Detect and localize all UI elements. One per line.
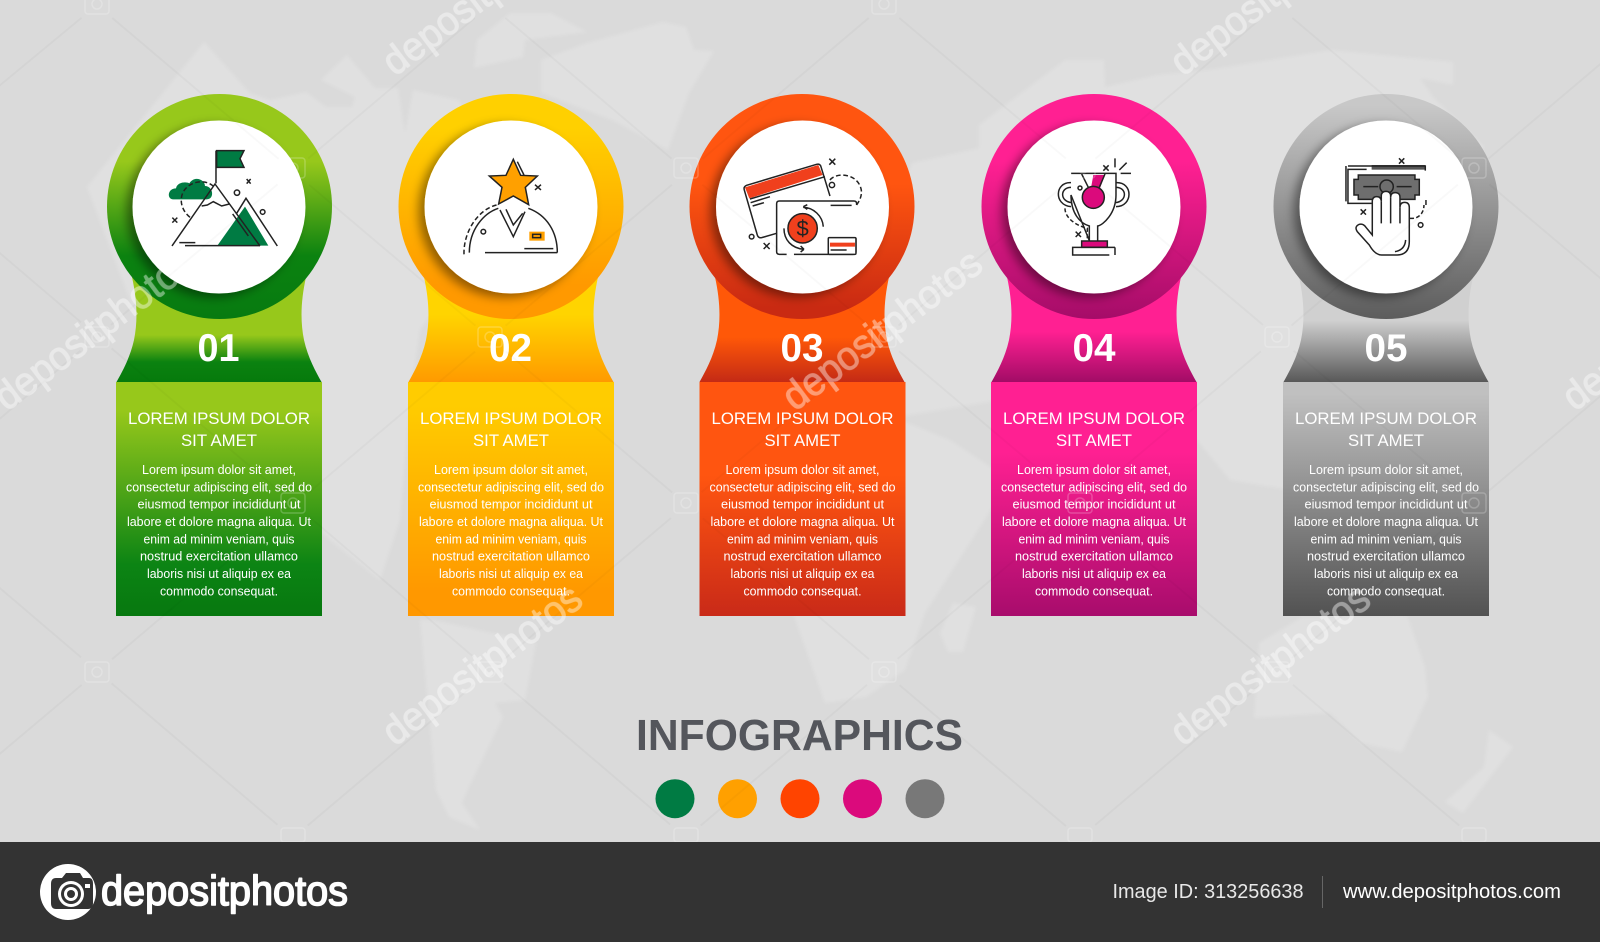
text block: eiusmod tempor incididunt ut	[1012, 498, 1176, 512]
white disc	[716, 120, 889, 294]
text block: enim ad minim veniam, quis	[1310, 532, 1462, 546]
watermark text: depositphotos	[1162, 576, 1378, 754]
text block: enim ad minim veniam, quis	[144, 532, 294, 546]
text block: enim ad minim veniam, quis	[727, 532, 878, 546]
text block: consectetur adipiscing elit, sed do	[1001, 480, 1187, 494]
text block	[710, 463, 896, 598]
neck and body	[1283, 277, 1489, 616]
icon: person with star	[464, 159, 557, 254]
text block	[1001, 463, 1187, 598]
text block: consectetur adipiscing elit, sed do	[418, 480, 604, 494]
text block: consectetur adipiscing elit, sed do	[126, 480, 312, 494]
panel: step 01	[107, 94, 332, 616]
text block: labore et dolore magna aliqua. Ut	[710, 515, 895, 529]
number: 01	[198, 327, 240, 370]
text block: eiusmod tempor incididunt ut	[721, 498, 885, 512]
text block: commodo consequat.	[744, 584, 862, 598]
ring	[1274, 94, 1498, 319]
text block	[418, 463, 604, 598]
text block: laboris nisi ut aliquip ex ea	[147, 567, 291, 581]
text block: labore et dolore magna aliqua. Ut	[1294, 515, 1479, 529]
text block: laboris nisi ut aliquip ex ea	[1314, 567, 1458, 581]
heading: LOREM IPSUM DOLOR	[1003, 409, 1185, 428]
text block: laboris nisi ut aliquip ex ea	[1022, 567, 1166, 581]
title: INFOGRAPHICS	[636, 711, 963, 760]
text block: Lorem ipsum dolor sit amet,	[1309, 463, 1463, 477]
panel: step 02	[398, 94, 624, 616]
text block: enim ad minim veniam, quis	[1018, 532, 1170, 546]
text block	[126, 463, 312, 598]
number: 04	[1072, 327, 1116, 370]
text block: nostrud exercitation ullamco	[724, 550, 882, 564]
heading: LOREM IPSUM DOLOR	[1295, 409, 1477, 428]
watermark camera marks	[85, 0, 1486, 842]
white disc	[1008, 120, 1180, 294]
white disc	[1300, 120, 1472, 294]
text block: eiusmod tempor incididunt ut	[430, 498, 593, 512]
heading	[420, 409, 602, 450]
logo icon: camera	[40, 864, 96, 920]
heading: SIT AMET	[1056, 431, 1132, 450]
text block: commodo consequat.	[160, 584, 278, 598]
text block: nostrud exercitation ullamco	[432, 550, 590, 564]
heading	[712, 409, 894, 450]
text block: laboris nisi ut aliquip ex ea	[439, 567, 583, 581]
heading	[1003, 409, 1185, 450]
neck and body	[116, 277, 322, 616]
heading: LOREM IPSUM DOLOR	[128, 409, 310, 428]
icon: mountain with flag	[169, 151, 277, 246]
text block: nostrud exercitation ullamco	[1015, 550, 1173, 564]
heading: SIT AMET	[181, 431, 257, 450]
neck and body	[700, 277, 906, 616]
text block: Lorem ipsum dolor sit amet,	[434, 463, 588, 477]
text block: enim ad minim veniam, quis	[436, 532, 586, 546]
watermark text: depositphotos	[774, 241, 990, 419]
ring	[107, 94, 332, 319]
icon: trophy with medal	[1058, 158, 1131, 255]
ring	[982, 94, 1206, 319]
neck and body	[991, 277, 1197, 616]
panel: step 05	[1274, 94, 1498, 616]
text block: eiusmod tempor incididunt ut	[1304, 498, 1468, 512]
text block: consectetur adipiscing elit, sed do	[1293, 480, 1479, 494]
icon: cards and dollar	[744, 159, 861, 254]
image id: Image ID: 313256638	[1112, 881, 1304, 903]
website: www.depositphotos.com	[1342, 881, 1561, 903]
text block: consectetur adipiscing elit, sed do	[710, 480, 896, 494]
heading: SIT AMET	[1348, 431, 1424, 450]
heading: LOREM IPSUM DOLOR	[420, 409, 602, 428]
white disc	[424, 120, 598, 294]
text block: commodo consequat.	[452, 584, 570, 598]
text block: nostrud exercitation ullamco	[1307, 550, 1465, 564]
legend dots	[656, 779, 944, 818]
text block: Lorem ipsum dolor sit amet,	[1017, 463, 1171, 477]
number: 03	[780, 327, 824, 370]
text block: labore et dolore magna aliqua. Ut	[127, 515, 312, 529]
text block: Lorem ipsum dolor sit amet,	[142, 463, 296, 477]
text block: labore et dolore magna aliqua. Ut	[1002, 515, 1187, 529]
heading	[128, 409, 310, 450]
text block: Lorem ipsum dolor sit amet,	[726, 463, 880, 477]
icon: hand on banknote	[1346, 158, 1426, 255]
heading: SIT AMET	[473, 431, 549, 450]
number: 05	[1364, 327, 1408, 370]
heading	[1295, 409, 1477, 450]
text block: eiusmod tempor incididunt ut	[138, 498, 301, 512]
ring	[398, 94, 624, 319]
watermark text: depositphotos	[374, 576, 590, 754]
world map silhouette	[87, 13, 1513, 830]
text block: laboris nisi ut aliquip ex ea	[730, 567, 875, 581]
footer bar	[0, 842, 1600, 942]
number: 02	[489, 327, 532, 370]
icon: cards and dollar: $	[797, 216, 809, 241]
panel: step 04	[982, 94, 1206, 616]
heading: LOREM IPSUM DOLOR	[712, 409, 894, 428]
white disc	[132, 120, 306, 294]
footer divider	[1322, 876, 1323, 908]
text block	[1293, 463, 1479, 598]
heading: SIT AMET	[764, 431, 840, 450]
text block: commodo consequat.	[1327, 584, 1445, 598]
neck and body	[408, 277, 614, 616]
text block: labore et dolore magna aliqua. Ut	[419, 515, 604, 529]
text block: commodo consequat.	[1035, 584, 1153, 598]
text block: nostrud exercitation ullamco	[140, 550, 298, 564]
panel: step 03	[690, 94, 914, 616]
logo wordmark: depositphotos	[101, 867, 348, 914]
ring	[690, 94, 914, 319]
